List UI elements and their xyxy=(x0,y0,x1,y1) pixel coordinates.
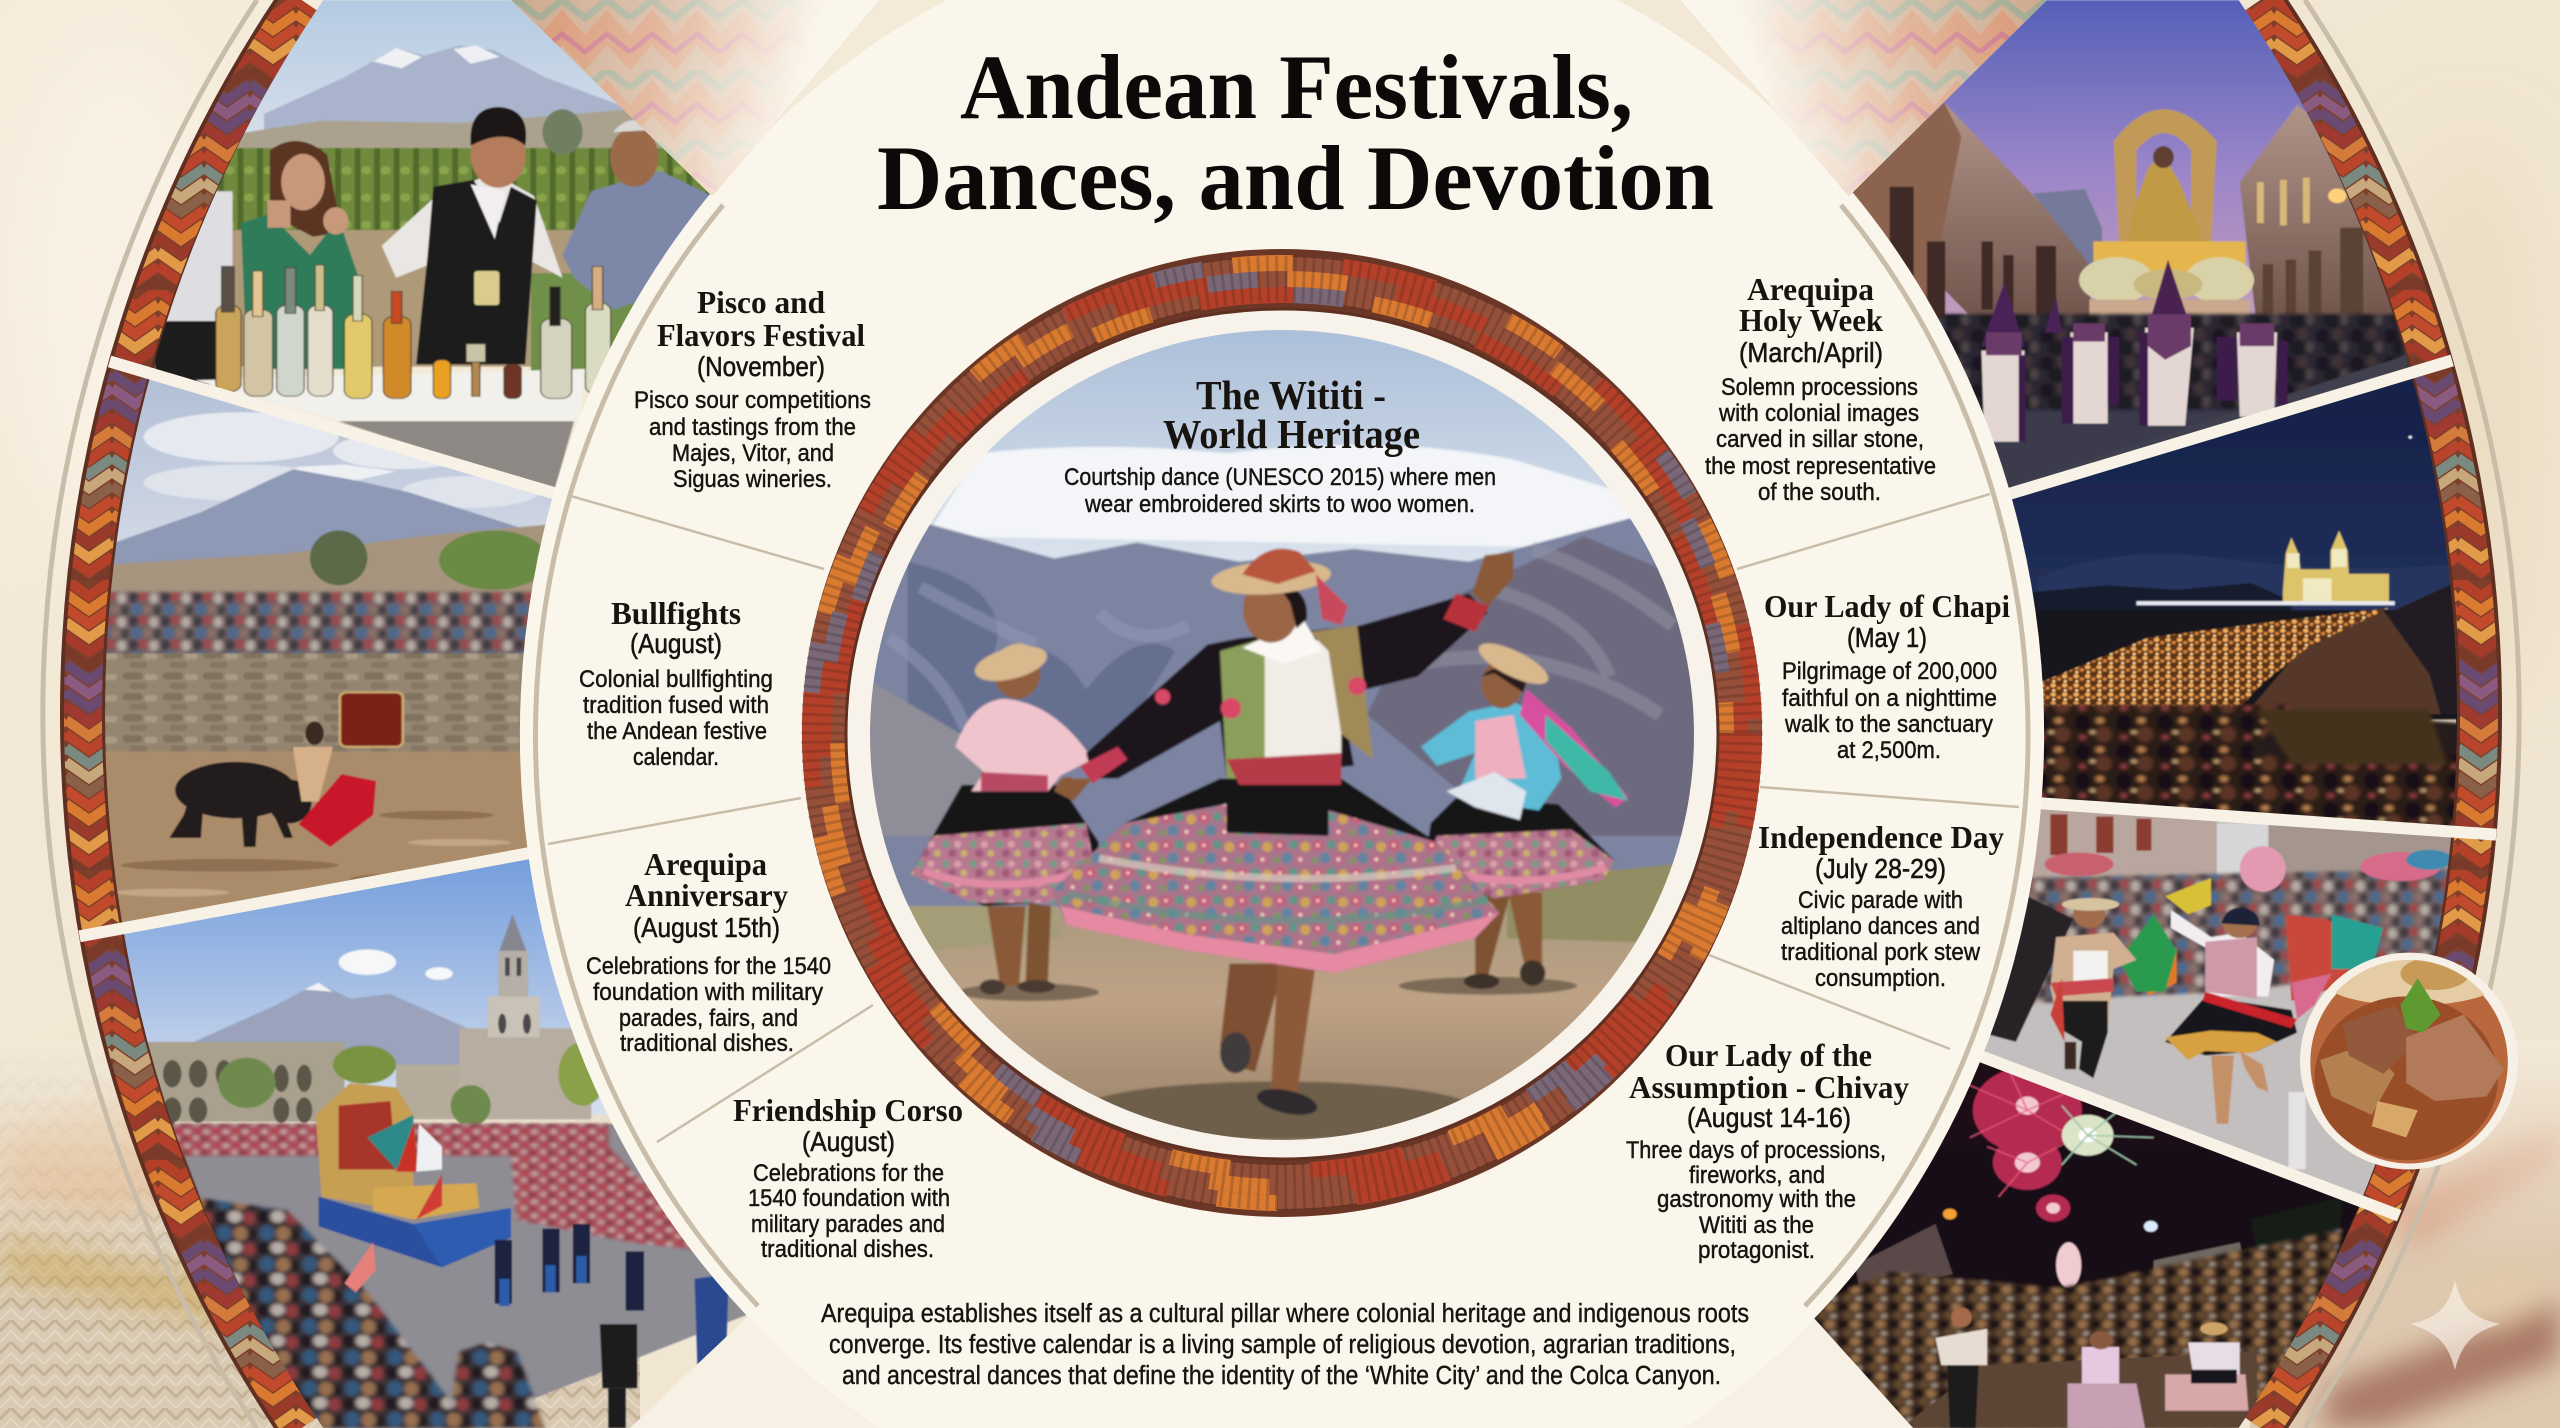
text block: Friendship Corso: traditional dishes. xyxy=(761,1236,934,1263)
text block: Arequipa Anniversary: parades, fairs, and xyxy=(619,1005,798,1032)
photo: Pisco and Flavors Festival xyxy=(154,0,710,488)
text block: Arequipa Anniversary: traditional dishes. xyxy=(620,1030,794,1057)
text block: Our Lady of Chapi xyxy=(1764,588,2010,764)
dancing man xyxy=(2050,898,2136,1078)
text block: Independence Day: Civic parade with xyxy=(1798,887,1963,914)
photo: Our Lady of the Assumption - Chivay xyxy=(1814,1062,2358,1428)
text block: The Wititi - World Heritage: World Heritage xyxy=(1163,411,1420,457)
title xyxy=(877,36,1714,229)
text block: Pisco and Flavors Festival: Pisco sour competitions xyxy=(634,387,871,414)
text block: Pisco and Flavors Festival: Majes, Vitor, and xyxy=(672,440,834,467)
text block: Friendship Corso: (August) xyxy=(802,1126,895,1157)
title: Dances, and Devotion xyxy=(877,127,1714,229)
text block: The Wititi - World Heritage: Courtship dance (UNESCO 2015) where men xyxy=(1064,464,1496,491)
summary text: and ancestral dances that define the identity of the ‘White City’ and the Colca Canyon. xyxy=(842,1362,1721,1390)
text block: Arequipa Holy Week: Solemn processions xyxy=(1721,374,1918,401)
dancing woman xyxy=(2165,908,2297,1124)
main dancer xyxy=(1053,549,1513,1119)
text block: Arequipa Holy Week: with colonial images xyxy=(1718,400,1919,427)
text block: Bullfights xyxy=(579,595,773,771)
text block: Friendship Corso: Friendship Corso xyxy=(733,1092,963,1128)
text block: Arequipa Anniversary: foundation with military xyxy=(593,979,824,1006)
text block: Friendship Corso: military parades and xyxy=(751,1211,945,1238)
text block: Our Lady of the Assumption - Chivay: protagonist. xyxy=(1698,1237,1815,1264)
text block: Our Lady of the Assumption - Chivay: Wititi as the xyxy=(1699,1212,1814,1239)
text block: Our Lady of Chapi: (May 1) xyxy=(1847,622,1927,653)
text block: Independence Day: altiplano dances and xyxy=(1781,913,1980,940)
text block: Independence Day: traditional pork stew xyxy=(1781,939,1980,966)
text block: Independence Day: consumption. xyxy=(1815,965,1946,992)
text block: Our Lady of the Assumption - Chivay: Three days of processions, xyxy=(1626,1137,1886,1164)
photo dividers xyxy=(78,354,2497,1222)
photo: Arequipa Anniversary xyxy=(124,859,747,1428)
textile accent: top left xyxy=(511,0,880,196)
text block: Our Lady of the Assumption - Chivay: gastronomy with the xyxy=(1657,1186,1856,1213)
text block: Arequipa Holy Week xyxy=(1705,271,1936,506)
text block: Pisco and Flavors Festival: (November) xyxy=(697,351,825,382)
text block: Our Lady of the Assumption - Chivay: Assumption - Chivay xyxy=(1629,1069,1909,1105)
text block: Bullfights: tradition fused with xyxy=(583,692,769,719)
summary text: converge. Its festive calendar is a living sample of religious devotion, agrarian traditions, xyxy=(829,1331,1736,1359)
text block: Independence Day: Independence Day xyxy=(1758,819,2004,855)
text block: The Wititi - World Heritage: wear embroidered skirts to woo women. xyxy=(1084,491,1475,518)
text block: Arequipa Holy Week: the most representative xyxy=(1705,453,1936,480)
left woman xyxy=(911,640,1099,995)
text block: Pisco and Flavors Festival: Siguas wineries. xyxy=(673,466,832,493)
icon: sparkle star xyxy=(2410,1280,2500,1370)
pale wedges below bottom photos xyxy=(630,1306,1913,1428)
photo: Bullfights xyxy=(105,380,552,922)
text block: Pisco and Flavors Festival: Pisco and xyxy=(697,284,825,320)
text block: Our Lady of the Assumption - Chivay xyxy=(1626,1037,1909,1264)
text block: Our Lady of the Assumption - Chivay: (August 14-16) xyxy=(1687,1102,1851,1133)
central cream panel xyxy=(520,0,2044,1428)
text block: Bullfights: the Andean festive xyxy=(587,718,767,745)
text block: The Wititi - World Heritage: The Wititi - xyxy=(1196,372,1386,418)
text block: Arequipa Anniversary: Arequipa xyxy=(644,846,767,882)
food inset: pork stew xyxy=(2300,953,2518,1169)
text block: Our Lady of Chapi: at 2,500m. xyxy=(1837,737,1941,764)
text block: Arequipa Anniversary xyxy=(586,846,831,1057)
textile corner: bottom right xyxy=(2250,1040,2560,1428)
text block: Arequipa Holy Week: Arequipa xyxy=(1747,271,1874,307)
text block: Arequipa Holy Week: of the south. xyxy=(1758,479,1881,506)
title: Andean Festivals, xyxy=(960,36,1633,138)
text block: Bullfights: Colonial bullfighting xyxy=(579,666,773,693)
text block: Bullfights: (August) xyxy=(630,628,722,659)
panel outline arcs xyxy=(535,205,2028,1306)
text block: Arequipa Holy Week: carved in sillar stone, xyxy=(1716,426,1924,453)
text block: Pisco and Flavors Festival: and tastings from the xyxy=(649,414,856,441)
text block: Friendship Corso: 1540 foundation with xyxy=(748,1185,950,1212)
text block: Friendship Corso xyxy=(733,1092,963,1263)
text block: Pisco and Flavors Festival: Flavors Festival xyxy=(657,317,865,353)
text block: Our Lady of Chapi: walk to the sanctuary xyxy=(1784,711,1994,738)
text block: The Wititi - World Heritage xyxy=(1064,372,1496,518)
text block: Arequipa Holy Week: Holy Week xyxy=(1739,302,1883,338)
textile accent: top right xyxy=(1680,0,2047,196)
right woman xyxy=(1421,635,1628,989)
text block: Our Lady of Chapi: Our Lady of Chapi xyxy=(1764,588,2010,624)
text block: Our Lady of Chapi: faithful on a nighttime xyxy=(1782,685,1997,712)
text block: Independence Day xyxy=(1758,819,2004,992)
photo: Our Lady of Chapi xyxy=(2012,378,2457,826)
central illustration: Wititi dancers xyxy=(844,313,1705,1174)
summary text: Arequipa establishes itself as a cultural pillar where colonial heritage and indigenous roots xyxy=(821,1300,1749,1328)
text block: Bullfights: calendar. xyxy=(633,744,719,771)
summary text xyxy=(821,1300,1749,1390)
photo: Arequipa Holy Week xyxy=(1852,0,2410,488)
central woven ring xyxy=(802,249,1762,1217)
text block: Our Lady of Chapi: Pilgrimage of 200,000 xyxy=(1782,658,1997,685)
text block: Arequipa Anniversary: Anniversary xyxy=(625,877,788,913)
text block: Arequipa Holy Week: (March/April) xyxy=(1739,337,1883,368)
text block: Arequipa Anniversary: Celebrations for the 1540 xyxy=(586,953,831,980)
photo: Independence Day xyxy=(1984,809,2451,1196)
text block: Our Lady of the Assumption - Chivay: Our Lady of the xyxy=(1665,1037,1872,1073)
text block: Pisco and Flavors Festival xyxy=(634,284,871,493)
text block: Our Lady of the Assumption - Chivay: fireworks, and xyxy=(1689,1162,1825,1189)
textile corner: bottom left xyxy=(0,1040,640,1428)
text block: Friendship Corso: Celebrations for the xyxy=(753,1160,944,1187)
text block: Independence Day: (July 28-29) xyxy=(1815,853,1946,884)
text block: Bullfights: Bullfights xyxy=(611,595,741,631)
text block: Arequipa Anniversary: (August 15th) xyxy=(633,912,780,943)
